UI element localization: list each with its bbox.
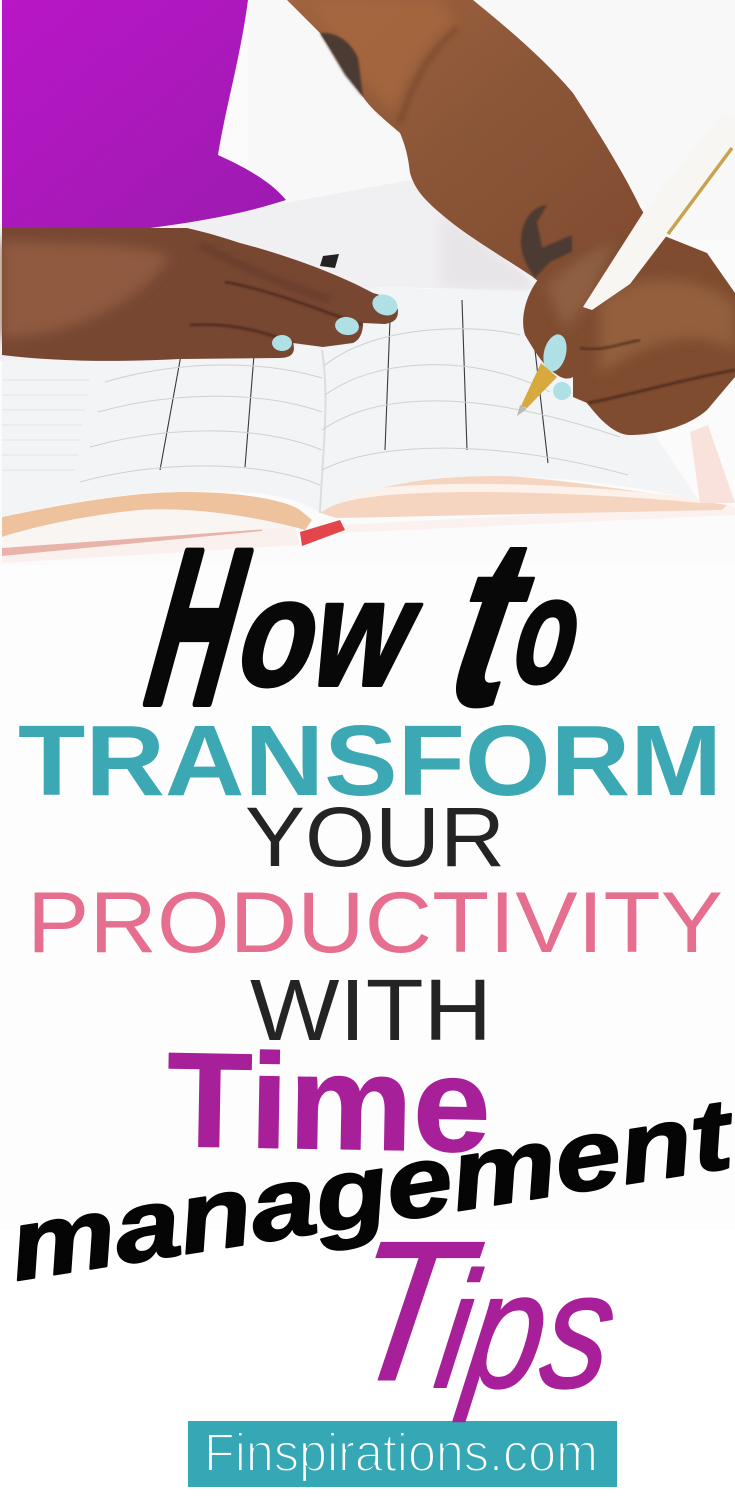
heading: How to: H xyxy=(135,504,260,750)
heading: management: management xyxy=(2,1077,735,1302)
heading: How to xyxy=(135,489,590,757)
photo: red spine xyxy=(300,520,345,546)
photo: right hand nails xyxy=(540,332,570,374)
heading: TRANSFORM: TRANSFORM xyxy=(18,705,722,817)
heading: How to: t xyxy=(433,489,551,757)
photo: planner and hands xyxy=(0,0,735,565)
photo: pen xyxy=(517,113,735,416)
page background tint xyxy=(0,565,735,1230)
heading: YOUR: YOUR xyxy=(245,790,505,884)
footer banner xyxy=(188,1421,617,1487)
footer site name: Finspirations.com xyxy=(204,1423,598,1483)
heading: Tips: ips xyxy=(426,1239,627,1423)
photo: book cover xyxy=(2,527,300,563)
photo: arm fold shadow xyxy=(400,28,457,123)
photo: forearm tattoos xyxy=(320,33,572,278)
heading: WITH: WITH xyxy=(250,962,492,1059)
photo: left page block edge xyxy=(2,492,312,537)
heading: How to: ow xyxy=(231,549,430,718)
heading: How to: o xyxy=(507,547,590,714)
photo: right forearm xyxy=(287,0,660,300)
heading: Tips xyxy=(333,1199,627,1423)
heading: PRODUCTIVITY: PRODUCTIVITY xyxy=(27,875,723,971)
photo: left hand nails xyxy=(272,291,401,351)
photo: right page block edge xyxy=(320,472,727,518)
photo: magenta shirt xyxy=(2,0,286,228)
photo: open planner pages xyxy=(2,287,698,517)
photo: bookmark clip xyxy=(320,254,339,268)
heading: Time: Time xyxy=(166,1024,492,1181)
photo: right hand xyxy=(523,225,735,435)
photo: left hand xyxy=(2,228,401,361)
heading: Tips: T xyxy=(333,1199,492,1423)
